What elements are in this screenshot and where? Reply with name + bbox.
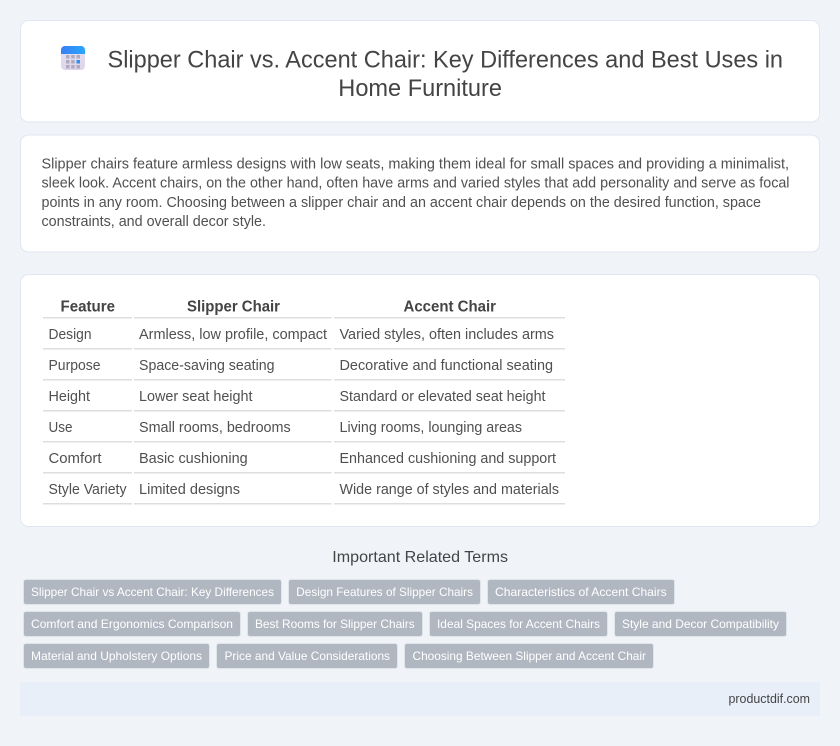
table row: Design: Design	[48, 327, 92, 343]
tag: Choosing Between Slipper and Accent Chair	[412, 649, 646, 663]
table row: Design	[43, 327, 565, 350]
panel: comparison table	[20, 274, 820, 526]
tag: Best Rooms for Slipper Chairs	[255, 617, 415, 631]
tag: Characteristics of Accent Chairs	[495, 585, 667, 599]
tag	[614, 612, 786, 636]
table row: Comfort	[43, 451, 565, 474]
table row: Use: Small rooms, bedrooms	[139, 420, 291, 436]
table header row	[43, 298, 565, 318]
tag	[404, 644, 654, 668]
table row: Purpose: Decorative and functional seating	[340, 358, 553, 374]
table row: Design: Varied styles, often includes arms	[340, 327, 554, 343]
table header row: Accent Chair	[404, 298, 496, 316]
tag	[24, 644, 210, 668]
table row: Comfort: Basic cushioning	[139, 451, 248, 467]
summary text	[42, 156, 790, 230]
table header row: Slipper Chair	[187, 298, 280, 316]
tag	[488, 580, 674, 604]
panel: title card	[20, 20, 820, 122]
tag	[430, 612, 608, 636]
table row: Use: Living rooms, lounging areas	[340, 420, 522, 436]
tag: Ideal Spaces for Accent Chairs	[437, 617, 600, 631]
icon: calendar	[61, 46, 85, 70]
table row: Style Variety: Wide range of styles and materials	[340, 482, 559, 498]
table row: Height	[43, 389, 565, 412]
panel: summary	[20, 135, 820, 252]
tag	[288, 580, 480, 604]
table row: Purpose	[43, 358, 565, 380]
table row: Purpose: Space-saving seating	[139, 358, 274, 374]
tag: Design Features of Slipper Chairs	[296, 585, 473, 599]
table row: Style Variety: Style Variety	[48, 482, 127, 498]
summary text: Slipper chairs feature armless designs with low seats, making them ideal for small spaces and providing a minimalist,	[42, 156, 789, 172]
table row: Use: Use	[48, 420, 72, 436]
tag: Price and Value Considerations	[224, 649, 390, 663]
tag: Material and Upholstery Options	[31, 649, 202, 663]
summary text: sleek look. Accent chairs, on the other hand, often have arms and varied styles that add personality and serve as focal	[42, 176, 790, 192]
heading: related terms: Important Related Terms	[332, 549, 508, 566]
tag: Slipper Chair vs Accent Chair: Key Differences	[31, 585, 274, 599]
tag	[24, 612, 240, 636]
tag: Comfort and Ergonomics Comparison	[31, 617, 233, 631]
tag	[216, 644, 398, 668]
table row: Height: Standard or elevated seat height	[340, 389, 546, 405]
tag: Style and Decor Compatibility	[622, 617, 779, 631]
title: Slipper Chair vs. Accent Chair: Key Differences and Best Uses in	[108, 46, 783, 74]
table row: Style Variety	[43, 482, 565, 504]
table row: Purpose: Purpose	[48, 358, 100, 374]
table row: Comfort: Comfort	[48, 451, 102, 467]
table row: Style Variety: Limited designs	[139, 482, 240, 498]
title	[108, 46, 783, 102]
tag	[248, 612, 422, 636]
footer bar	[20, 682, 820, 716]
table header row: Feature	[60, 298, 115, 316]
tag	[24, 580, 282, 604]
table row: Design: Armless, low profile, compact	[139, 327, 327, 343]
footer source text: productdif.com	[728, 691, 810, 706]
tag list: related terms	[24, 580, 786, 668]
title: Home Furniture	[338, 75, 502, 102]
table row: Height: Height	[48, 389, 90, 405]
table row: Height: Lower seat height	[139, 389, 252, 405]
table row: Comfort: Enhanced cushioning and support	[340, 451, 556, 467]
table row: Use	[43, 420, 565, 442]
summary text: constraints, and overall decor style.	[42, 214, 266, 230]
summary text: points in any room. Choosing between a slipper chair and an accent chair depends on the desired function, space	[42, 195, 761, 211]
